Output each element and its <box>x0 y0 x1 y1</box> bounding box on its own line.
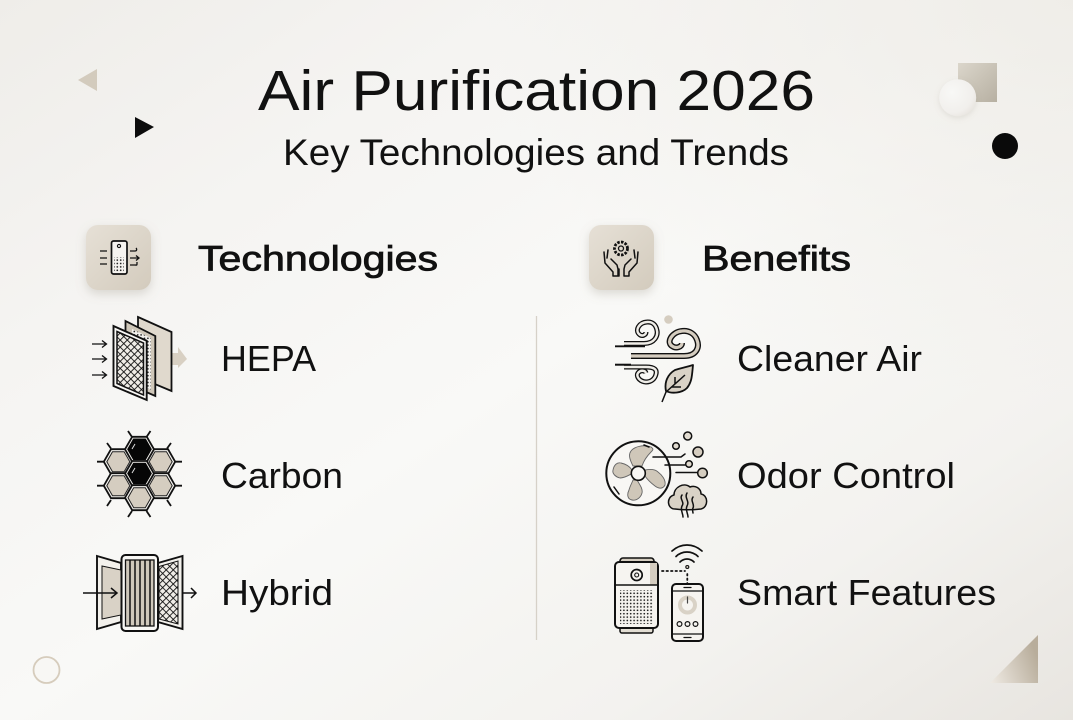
label: Hybrid: Hybrid <box>221 572 333 613</box>
label: Cleaner Air: Cleaner Air <box>737 338 922 379</box>
item: Smart Features <box>615 545 996 641</box>
item: Carbon <box>97 431 343 517</box>
item: Hybrid <box>83 555 333 631</box>
icon: carbon honeycomb <box>97 431 182 517</box>
decoration: black triangle <box>135 117 154 138</box>
panel: technologies <box>83 225 438 631</box>
item: Odor Control <box>606 432 955 517</box>
item: Cleaner Air <box>615 315 922 402</box>
heading: technologies: Technologies <box>198 240 438 278</box>
icon: layered HEPA filter <box>92 317 187 400</box>
panel: benefits <box>589 225 996 641</box>
label: HEPA: HEPA <box>221 338 316 379</box>
decoration: triangle bottom right <box>990 635 1038 683</box>
label: Odor Control: Odor Control <box>737 455 955 496</box>
icon: wind and leaf <box>615 315 698 402</box>
item: HEPA <box>92 317 316 400</box>
label: Carbon: Carbon <box>221 455 343 496</box>
icon: fan with odor particles <box>606 432 707 517</box>
title: Air Purification 2026 <box>258 59 815 123</box>
decoration: black circle <box>992 133 1018 159</box>
icon: benefits badge <box>589 225 654 290</box>
divider <box>536 316 538 640</box>
icon: hybrid filter <box>83 555 196 631</box>
icon: technologies badge <box>86 225 151 290</box>
heading: benefits: Benefits <box>702 240 851 278</box>
label: Smart Features: Smart Features <box>737 572 996 613</box>
subtitle: Key Technologies and Trends <box>283 132 789 173</box>
decoration: square and glass circle <box>939 63 997 116</box>
icon: smart purifier with phone <box>615 545 703 641</box>
decoration: tan triangle top left <box>78 69 97 91</box>
decoration: outline circle bottom left <box>34 657 60 683</box>
